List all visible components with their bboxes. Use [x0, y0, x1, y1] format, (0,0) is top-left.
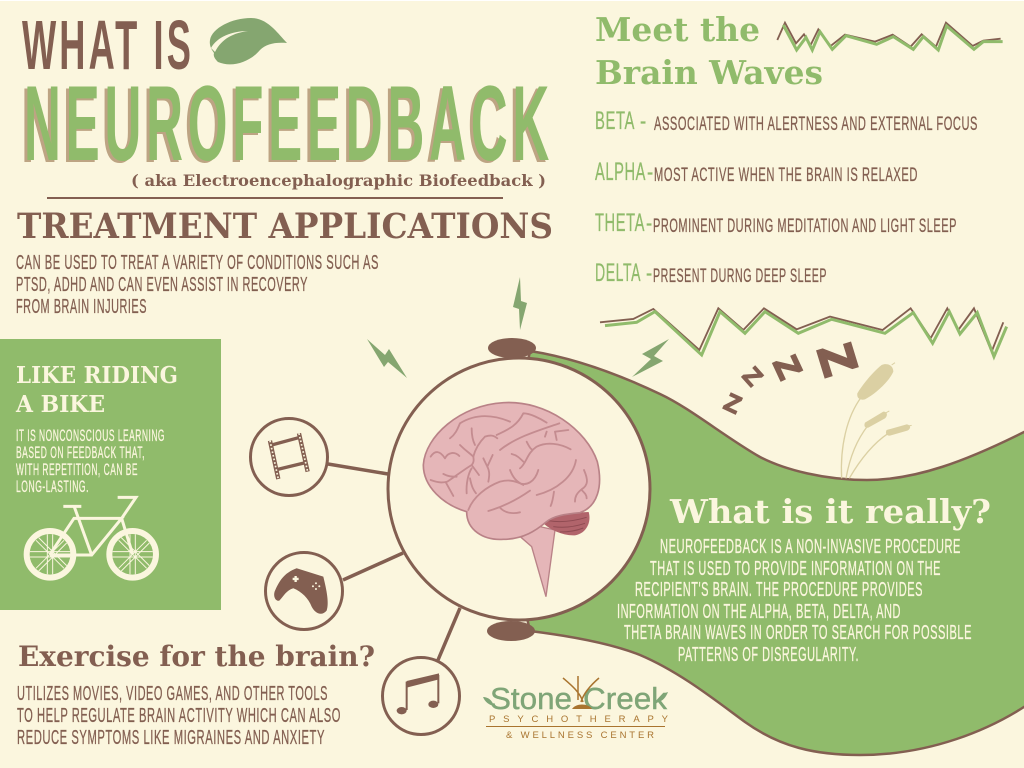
heading: exercise for the brain: Exercise for the brain?	[18, 640, 375, 673]
text: treatment description: FROM BRAIN INJURIES	[16, 295, 147, 318]
list: alpha wave	[595, 158, 918, 186]
text: what is it really description	[617, 535, 972, 666]
text: what is it really description: PATTERNS OF DISREGULARITY.	[678, 643, 859, 666]
connector: game	[343, 553, 403, 580]
heading: what is it really: What is it really?	[669, 492, 991, 531]
icon: sleeping z letters: Z	[720, 388, 745, 420]
logo: stone creek: & WELLNESS CENTER	[506, 730, 654, 741]
list: theta wave	[595, 209, 957, 237]
icon: film	[250, 418, 328, 496]
text: exercise description: TO HELP REGULATE BRAIN ACTIVITY WHICH CAN ALSO	[17, 704, 341, 727]
icon: sleeping z letters: Z	[765, 350, 809, 385]
text: exercise description: UTILIZES MOVIES, VIDEO GAMES, AND OTHER TOOLS	[17, 682, 328, 705]
text: treatment description: PTSD, ADHD AND CAN EVEN ASSIST IN RECOVERY	[16, 273, 308, 296]
heading: meet the brain waves: Meet the	[595, 10, 760, 49]
list: delta wave	[595, 259, 827, 287]
list: theta wave: THETA	[595, 209, 645, 237]
heading: like riding a bike	[15, 362, 178, 418]
text: bike description: LONG-LASTING.	[16, 478, 89, 496]
logo: stone creek: Stone	[490, 681, 572, 716]
icon: brain	[423, 402, 600, 597]
brain circle	[388, 358, 650, 620]
subtitle: ( aka Electroencephalographic Biofeedback )	[131, 171, 546, 190]
icon: sleeping z letters	[720, 338, 866, 420]
list: beta wave: BETA	[595, 107, 635, 135]
text: bike description: IT IS NONCONSCIOUS LEARNING	[16, 427, 165, 445]
icon: music note	[382, 658, 460, 734]
text: exercise description: REDUCE SYMPTOMS LIKE MIGRAINES AND ANXIETY	[17, 726, 325, 749]
list: beta wave: -	[640, 107, 647, 135]
panel: green wave background	[500, 351, 1024, 755]
text: exercise description	[17, 682, 341, 749]
logo: stone creek	[483, 676, 669, 741]
connector: music	[438, 608, 460, 660]
panel: like riding a bike	[0, 339, 221, 610]
icon: bolt right	[632, 339, 669, 377]
text: bike description: BASED ON FEEDBACK THAT,	[16, 444, 145, 462]
icon: sleeping z letters: Z	[737, 362, 768, 392]
list: delta wave: PRESENT DURNG DEEP SLEEP	[653, 265, 827, 287]
text: treatment description	[16, 251, 379, 318]
icon: bicycle	[27, 497, 156, 578]
title: neurofeedback	[21, 63, 554, 185]
logo: stone creek: Creek	[583, 681, 667, 716]
icon: bolt left	[367, 339, 407, 378]
list: theta wave: -	[646, 209, 653, 237]
text: bike description: WITH REPETITION, CAN BE	[16, 461, 138, 479]
heading: meet the brain waves: Brain Waves	[595, 53, 823, 92]
icon: leaf	[210, 18, 287, 64]
icon: reeds	[841, 363, 912, 478]
icon: bolt top	[513, 277, 527, 330]
heading: like riding a bike: A BIKE	[15, 391, 105, 418]
icon: game controller	[266, 552, 342, 630]
list: delta wave: -	[646, 259, 653, 287]
heading: treatment applications: TREATMENT APPLICATIONS	[17, 206, 553, 247]
connector: film	[328, 464, 388, 474]
list: alpha wave: ALPHA	[595, 158, 646, 186]
heading: like riding a bike: LIKE RIDING	[16, 362, 178, 389]
icon: sleeping z letters: Z	[807, 338, 866, 381]
chart: bottom brain wave line	[600, 308, 1007, 357]
list: delta wave: DELTA	[595, 259, 641, 287]
blob top	[488, 338, 536, 358]
text: bike description	[16, 427, 165, 496]
logo: stone creek: PSYCHOTHERAPY	[489, 714, 669, 725]
text: treatment description: CAN BE USED TO TREAT A VARIETY OF CONDITIONS SUCH AS	[16, 251, 379, 274]
list: alpha wave: -	[647, 158, 654, 186]
title: what is: WHAT IS	[22, 6, 194, 84]
list: beta wave	[595, 107, 978, 135]
chart: top brain wave line	[777, 23, 1003, 50]
blob bottom	[487, 621, 535, 641]
heading: meet the brain waves	[595, 10, 823, 92]
